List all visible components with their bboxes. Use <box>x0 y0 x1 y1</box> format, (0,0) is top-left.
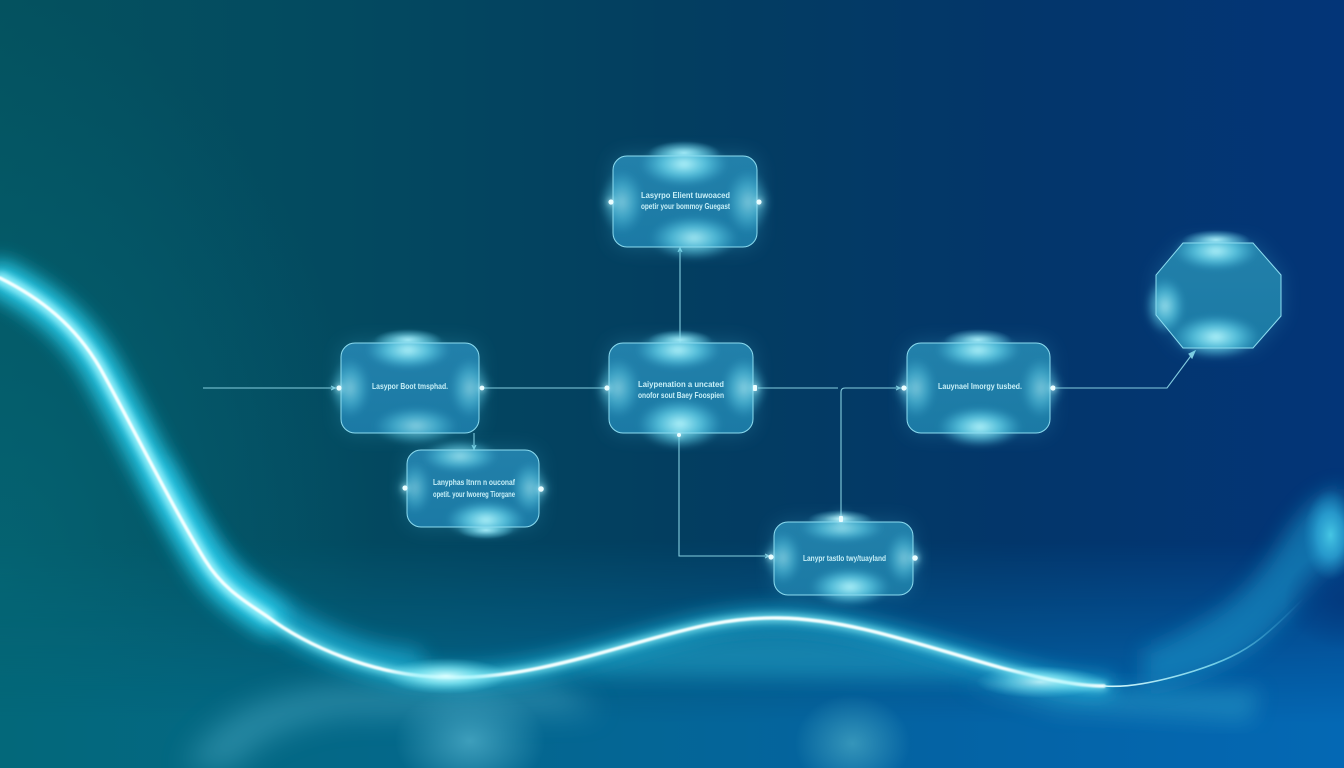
outer halo <box>613 156 757 247</box>
connector: center box to junction <box>758 387 838 389</box>
wave: right edge glow <box>1290 490 1344 580</box>
border <box>341 343 479 433</box>
box: center <box>596 330 766 449</box>
border <box>907 343 1050 433</box>
box: right <box>896 329 1061 447</box>
label: opetir your bommoy Guegast <box>641 202 730 211</box>
inner glows <box>399 440 548 539</box>
connector: left box to center box <box>484 387 606 389</box>
reflection: right band <box>960 684 1260 722</box>
connector: center box down to bottom box <box>679 434 770 556</box>
wave: hot spot right <box>976 666 1104 698</box>
label: Lanypr tastlo twy/tuayland <box>803 554 886 563</box>
label: onofor sout Baey Foospien <box>638 391 724 400</box>
connector: left box to lower-left box <box>473 433 475 450</box>
wave: thin fading tail <box>1104 598 1304 686</box>
inner glows <box>1145 232 1260 359</box>
inner glows <box>600 142 770 260</box>
label: Lasyrpo Elient tuwoaced <box>641 191 730 200</box>
arrowhead: lower-left box <box>472 445 476 449</box>
arrowhead: left box <box>331 386 335 390</box>
top glow <box>808 510 872 528</box>
octagon <box>1145 230 1281 359</box>
arrowhead: right box <box>896 386 900 390</box>
reflection: wedge on the left <box>185 685 600 768</box>
inner glows <box>596 331 766 449</box>
wave: mid glow <box>0 278 1104 686</box>
connectors <box>203 248 1195 558</box>
panel <box>613 156 757 247</box>
panel <box>774 522 913 595</box>
arrowhead: octagon <box>1189 351 1195 358</box>
top glow <box>648 141 720 165</box>
border <box>774 522 913 595</box>
reflection: center column <box>795 670 910 768</box>
wave: hot spot left <box>384 658 508 694</box>
panel <box>907 343 1050 433</box>
ports <box>608 199 762 205</box>
border <box>407 450 539 527</box>
panel <box>609 343 753 433</box>
floor reflection <box>185 660 1260 768</box>
ports <box>402 485 544 492</box>
label: Lanyphas Itnrn n ouconaf <box>433 478 515 487</box>
bottom glow <box>458 521 514 539</box>
glowing wave <box>0 278 1344 698</box>
connector: input to left box <box>203 387 336 389</box>
wave: wide glow <box>0 278 1104 686</box>
panel <box>407 450 539 527</box>
outer halo <box>609 343 753 433</box>
inner glows <box>330 331 490 445</box>
top glow <box>374 329 442 351</box>
wave: bright core <box>0 278 1104 686</box>
outer halo <box>341 343 479 433</box>
reflection: left column <box>395 660 545 768</box>
outer halo <box>407 450 539 527</box>
wave: soft band under crest <box>570 628 1010 680</box>
inner glows <box>896 332 1061 447</box>
inner glows <box>765 514 922 606</box>
label: Laiypenation a uncated <box>638 380 724 389</box>
panel <box>1156 243 1281 348</box>
connector: right box to octagon <box>1056 353 1193 388</box>
border <box>1156 243 1281 348</box>
connector: junction to right box and bottom box <box>841 388 905 520</box>
label: Lauynael Imorgy tusbed. <box>938 382 1022 391</box>
wave: dark notch at right edge <box>1224 550 1344 650</box>
box: bottom <box>765 510 922 606</box>
border <box>613 156 757 247</box>
border <box>609 343 753 433</box>
ports <box>604 385 757 437</box>
panel <box>341 343 479 433</box>
wave: left mid glow <box>0 278 268 617</box>
outer halo <box>1156 243 1281 348</box>
arrowhead: top box <box>678 248 682 252</box>
box: left <box>330 329 490 445</box>
outer halo <box>774 522 913 595</box>
ports <box>768 516 918 561</box>
wave: blue tail band on the right <box>1144 488 1344 690</box>
box: lower left <box>399 440 548 539</box>
label: opetit. your Iwoereg Tiorgane <box>433 490 515 499</box>
box: top <box>600 141 770 260</box>
label: Lasypor Boot tmsphad. <box>372 382 448 391</box>
ports <box>901 385 1056 391</box>
wave: concave side glow <box>160 472 412 660</box>
outer halo <box>907 343 1050 433</box>
wave: left wide glow <box>0 278 268 617</box>
top glow <box>1182 230 1250 250</box>
arrowhead: bottom box <box>765 554 769 558</box>
connector: center box up to top box <box>679 248 681 343</box>
top glow <box>648 330 712 350</box>
top glow <box>944 329 1012 351</box>
ports <box>336 385 484 391</box>
